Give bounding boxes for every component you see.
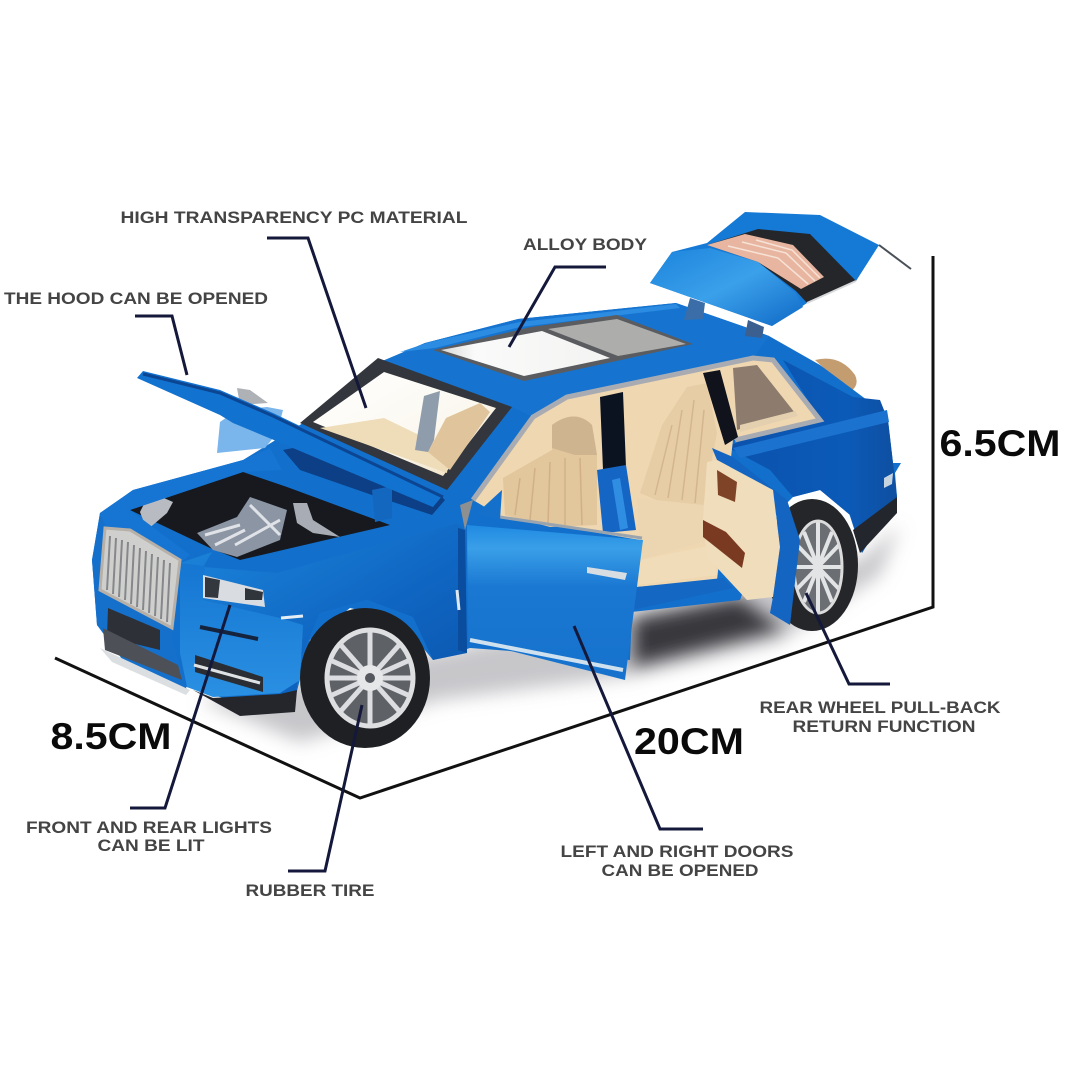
dimension: width: 8.5CM xyxy=(50,716,172,757)
front seat xyxy=(503,416,597,527)
B pillar xyxy=(600,392,626,470)
spare wheel behind body xyxy=(815,359,857,392)
window chrome trim xyxy=(473,358,820,500)
callout: alloy body: ALLOY BODY xyxy=(523,235,648,254)
callout: doors xyxy=(560,626,794,880)
callout: front and rear lights: CAN BE LIT xyxy=(98,836,205,855)
callout: front and rear lights xyxy=(26,605,272,855)
plate and lower grille xyxy=(107,608,160,650)
sill xyxy=(632,578,733,610)
grille xyxy=(100,528,180,628)
interior xyxy=(473,358,820,610)
windscreen xyxy=(300,358,512,490)
tailgate base xyxy=(650,212,879,326)
callout: rear wheel: REAR WHEEL PULL-BACK xyxy=(760,698,1001,717)
dimension frame xyxy=(55,256,933,798)
rear bumper xyxy=(853,497,897,553)
engine chrome xyxy=(140,492,173,530)
gas strut xyxy=(879,245,911,269)
dimension: height: 6.5CM xyxy=(940,423,1060,464)
callout: front and rear lights: FRONT AND REAR LIGHTS xyxy=(26,818,272,837)
headlight xyxy=(203,575,265,607)
open tailgate xyxy=(650,212,911,326)
callout: rear wheel: RETURN FUNCTION xyxy=(792,717,976,736)
tailgate supports xyxy=(684,298,764,338)
nose xyxy=(180,563,303,697)
callout: high transparency PC material xyxy=(120,208,467,408)
callout: rubber tire xyxy=(246,705,374,900)
front wheel xyxy=(300,608,430,748)
callout: doors: CAN BE OPENED xyxy=(602,861,758,880)
callout: high transparency PC material: HIGH TRANSPARENCY PC MATERIAL xyxy=(120,208,467,227)
rear side window xyxy=(733,365,795,430)
light panel behind hood xyxy=(217,388,283,453)
bonnet rim xyxy=(100,448,282,563)
front door open xyxy=(460,490,643,680)
inner dark panel xyxy=(707,229,856,303)
side marker xyxy=(281,616,303,618)
roof xyxy=(380,303,769,417)
ground shadow xyxy=(200,525,900,742)
car body base xyxy=(92,303,901,700)
C pillar xyxy=(703,370,738,445)
rear wheel xyxy=(766,499,858,631)
rear seat xyxy=(640,383,717,507)
sunroof xyxy=(433,315,693,381)
callout: hood xyxy=(4,289,268,375)
callout: rubber tire: RUBBER TIRE xyxy=(246,881,374,900)
rear door open xyxy=(703,448,800,625)
rear quarter panel xyxy=(727,360,897,553)
callout: doors: LEFT AND RIGHT DOORS xyxy=(560,842,794,861)
model car xyxy=(92,212,911,748)
open hood xyxy=(137,371,445,522)
lower vent xyxy=(195,655,263,692)
callout: hood: THE HOOD CAN BE OPENED xyxy=(4,289,268,308)
under bumper xyxy=(193,690,297,716)
callout: rear wheel xyxy=(760,593,1001,736)
callout: alloy body xyxy=(509,235,648,347)
outer panel xyxy=(650,248,803,326)
left face xyxy=(92,513,187,690)
fender xyxy=(180,523,467,695)
pink heated glass xyxy=(707,234,824,289)
car front xyxy=(92,513,467,716)
slit xyxy=(200,627,258,639)
dimension: length: 20CM xyxy=(634,721,744,762)
engine bay xyxy=(130,472,390,560)
